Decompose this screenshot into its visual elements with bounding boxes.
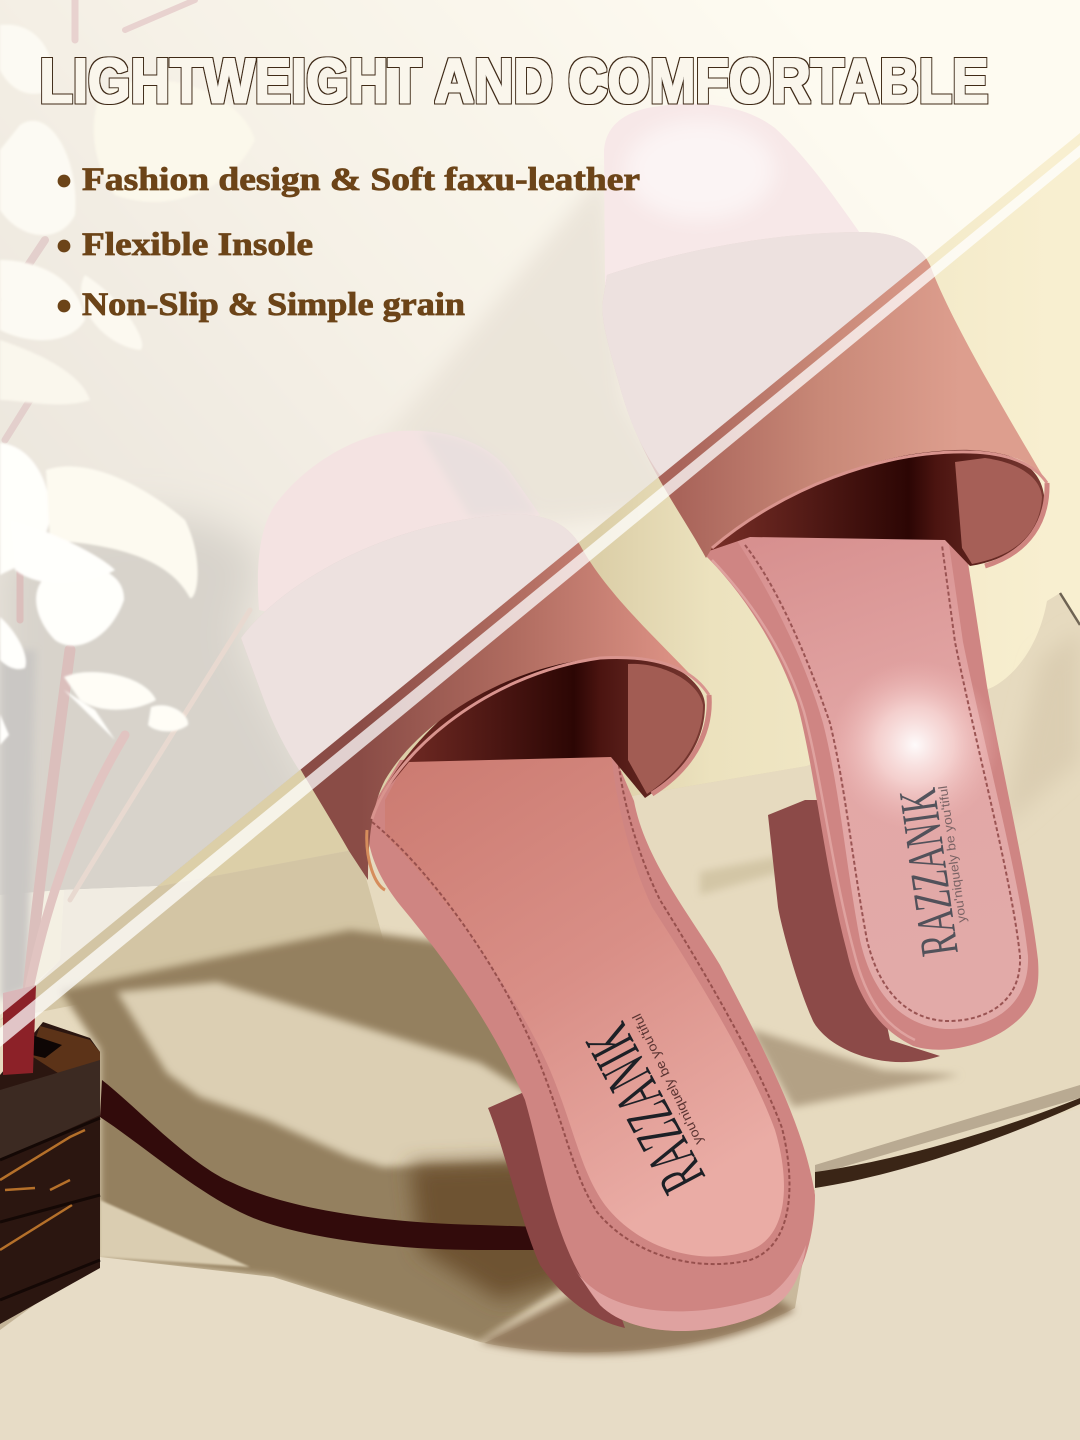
upper sandal outer sole [706,530,1038,1050]
flower stems [0,0,250,1080]
logo on lower insole: RAZZANIK [571,1013,719,1204]
feature list [58,162,640,323]
lower sandal outer sole [367,750,815,1331]
upper sandal insole [730,530,1028,1029]
logo on lower insole [571,1011,719,1204]
logo on upper insole [887,785,970,960]
upper sandal toe cap [604,104,865,290]
sandal: upper right [602,104,1047,1062]
upper sandal strap [602,232,1047,558]
translucent white diagonal overlay [0,0,1080,1015]
lower sandal heel [488,1085,625,1328]
wooden block [0,985,100,1324]
logo on lower insole: you'niquely be you'tiful [629,1011,706,1147]
lower sandal strap [241,514,709,880]
logo on upper insole: you'niquely be you'tiful [936,785,969,924]
upper sandal inner shadow [706,449,1044,566]
white flowers [0,25,255,745]
lower sandal inner shadow [378,650,705,800]
lower sandal toe cap [258,431,540,620]
logo on upper insole: RAZZANIK [887,785,970,960]
bullet 3: Non-Slip & Simple grain [82,287,465,323]
dark curved table base [100,1080,570,1250]
lower sandal insole [385,750,784,1257]
upper sandal heel [768,800,940,1062]
white diagonal band [0,145,1080,1047]
sandal: lower left [241,431,815,1331]
bullet 2: Flexible Insole [82,227,313,263]
bullet 1: Fashion design & Soft faxu-leather [82,162,640,198]
